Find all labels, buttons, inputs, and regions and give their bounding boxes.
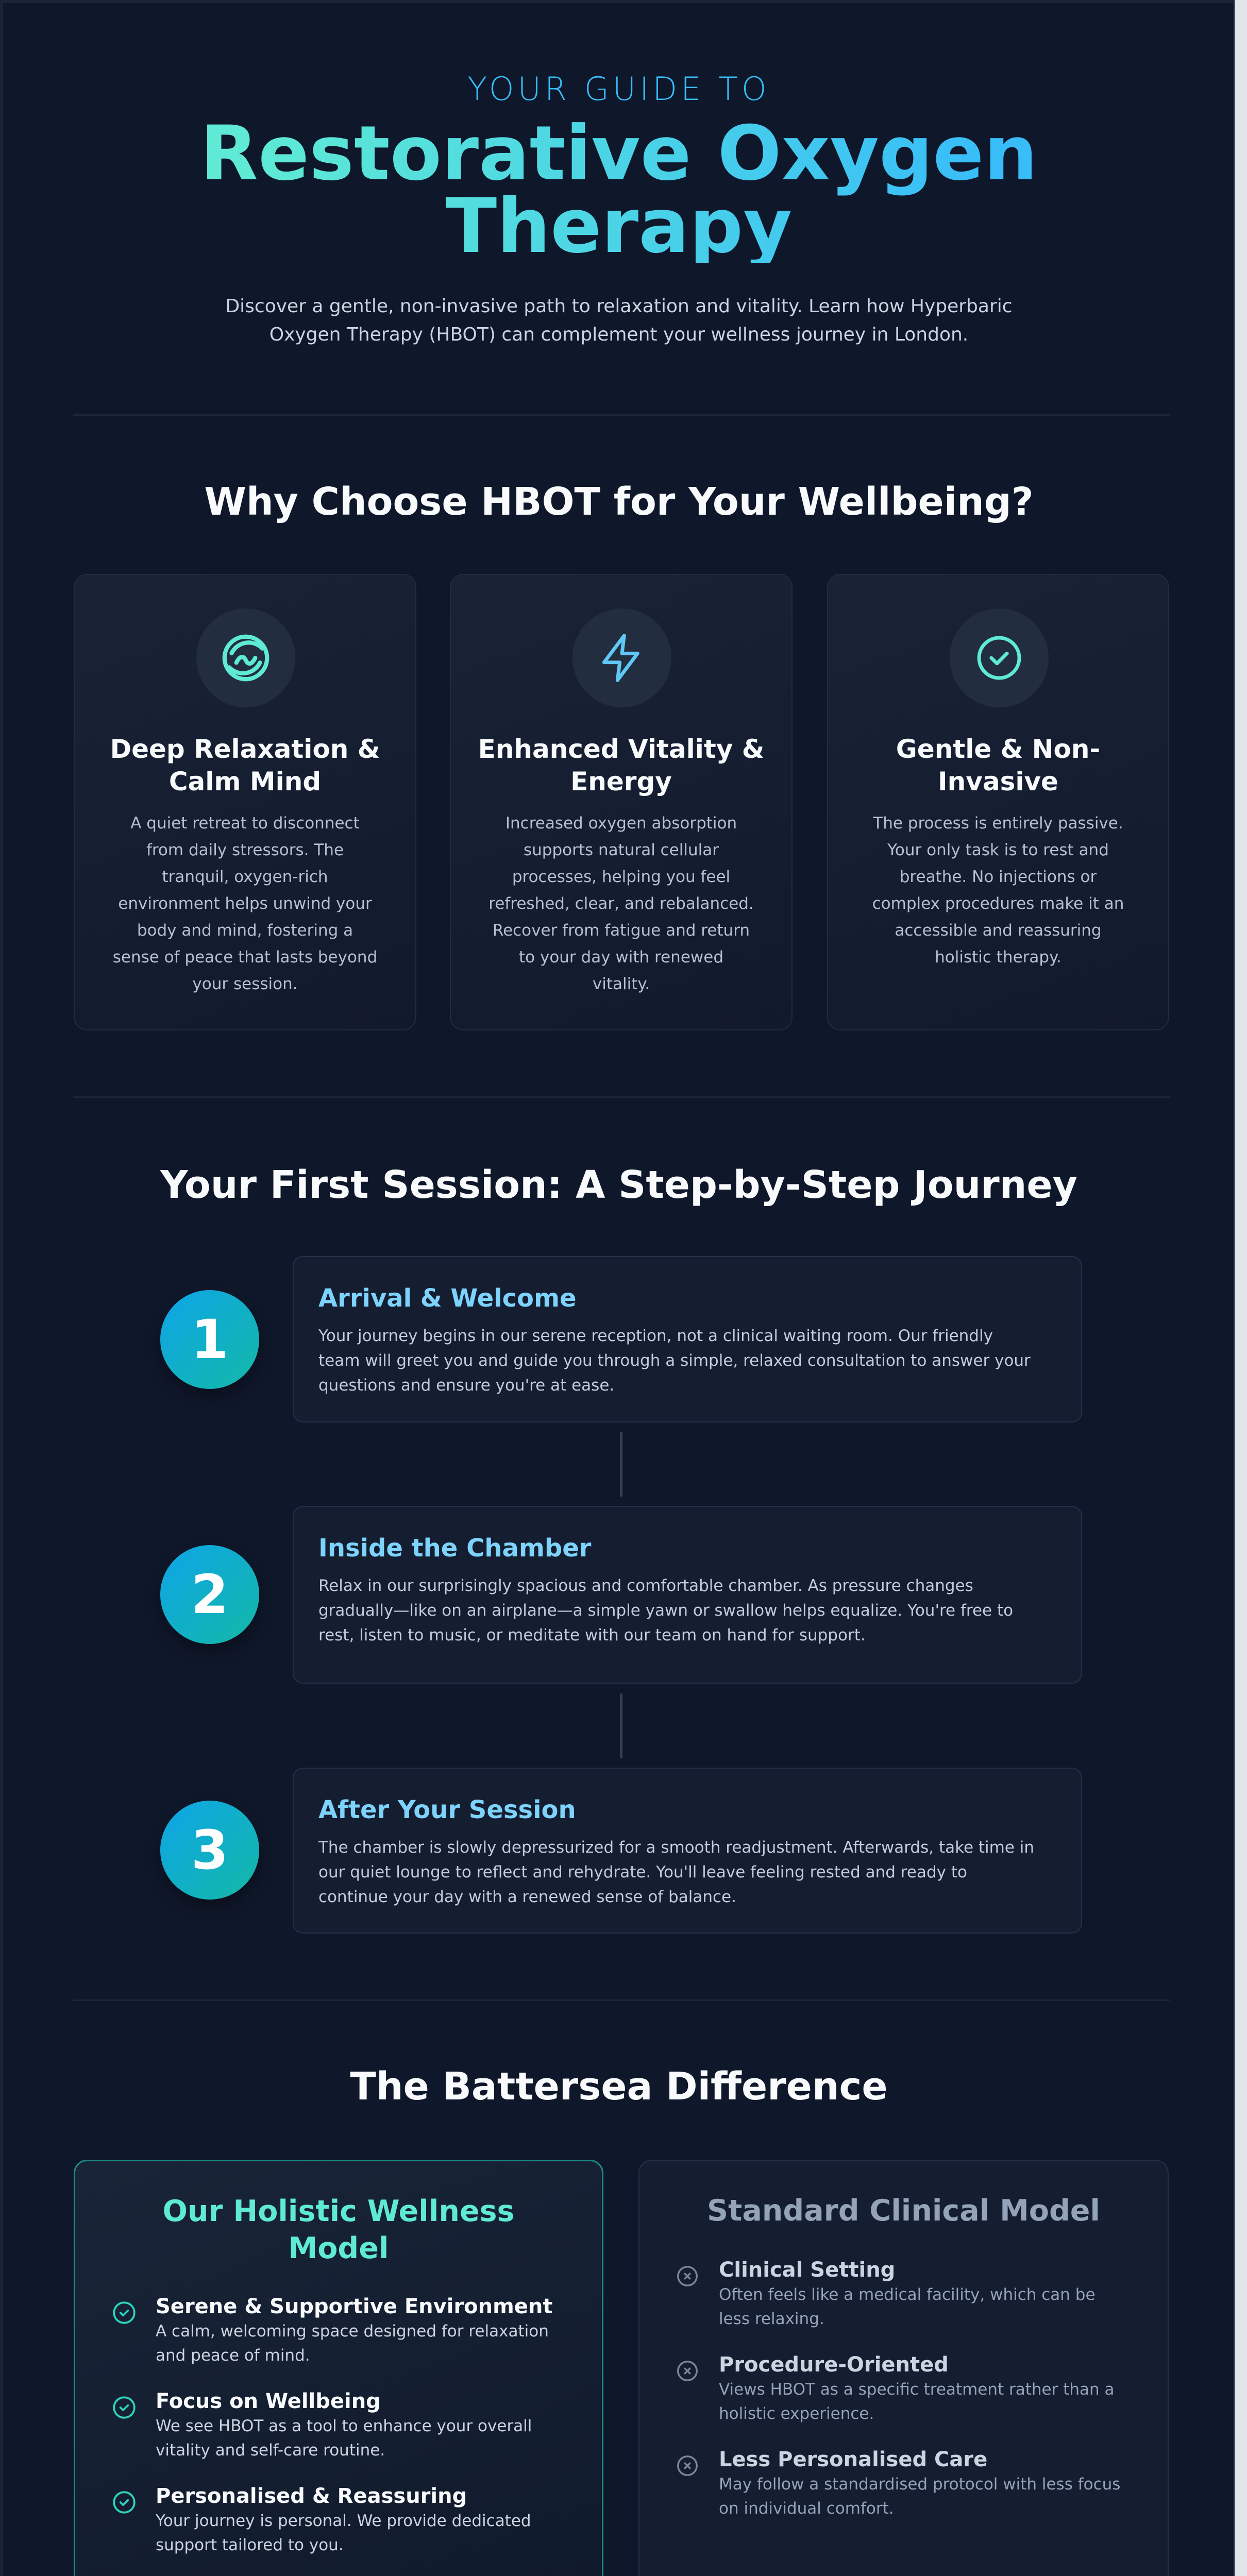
item 2: Focus on Wellbeing bbox=[156, 2389, 381, 2413]
card text: processes, helping you feel bbox=[512, 868, 730, 886]
item 2: holistic experience. bbox=[719, 2404, 874, 2423]
panel: standard clinical model bbox=[638, 2160, 1169, 2576]
connector 2 bbox=[620, 1693, 622, 1758]
item 2 bbox=[113, 2389, 532, 2460]
step 3 card: The chamber is slowly depressurized for a smooth readjustment. Afterwards, take time in bbox=[318, 1838, 1034, 1857]
step 1 card: team will greet you and guide you through a simple, relaxed consultation to answer your bbox=[318, 1351, 1031, 1370]
item 1: and peace of mind. bbox=[156, 2346, 310, 2365]
step 1 number bbox=[160, 1290, 259, 1389]
card text: holistic therapy. bbox=[935, 948, 1061, 967]
card title bbox=[896, 734, 1100, 796]
header: eyebrow: YOUR GUIDE TO bbox=[467, 70, 770, 108]
step 1 number: 1 bbox=[191, 1308, 228, 1371]
card text: Recover from fatigue and return bbox=[493, 921, 750, 940]
step 2 number: 2 bbox=[191, 1563, 228, 1626]
item 3: Your journey is personal. We provide dedicated bbox=[156, 2512, 531, 2530]
heading: why choose: Why Choose HBOT for Your Wellbeing? bbox=[204, 480, 1034, 524]
item 1: Clinical Setting bbox=[719, 2258, 895, 2282]
step 1 card: Your journey begins in our serene reception, not a clinical waiting room. Our friendly bbox=[318, 1327, 993, 1345]
card: vitality bbox=[450, 574, 793, 1030]
card title: Gentle & Non- bbox=[896, 734, 1100, 764]
step 2 card: Inside the Chamber bbox=[318, 1534, 591, 1563]
card text: your session. bbox=[192, 975, 298, 993]
header: subtitle: Oxygen Therapy (HBOT) can complement your wellness journey in London. bbox=[269, 324, 968, 345]
card text: vitality. bbox=[593, 975, 650, 993]
title bbox=[163, 2194, 514, 2265]
card text: tranquil, oxygen-rich bbox=[162, 868, 328, 886]
item 1: Serene & Supportive Environment bbox=[156, 2295, 553, 2318]
item 3: on individual comfort. bbox=[719, 2499, 894, 2518]
step 3 card: continue your day with a renewed sense of balance. bbox=[318, 1888, 736, 1906]
card text: breathe. No injections or bbox=[900, 868, 1097, 886]
step 1 card bbox=[293, 1256, 1082, 1422]
heading: battersea difference: The Battersea Difference bbox=[350, 2064, 888, 2109]
card title: Invasive bbox=[938, 767, 1058, 796]
card title bbox=[478, 734, 764, 796]
step 2 number bbox=[160, 1545, 259, 1644]
item 2: Procedure-Oriented bbox=[719, 2353, 949, 2377]
step 2 card: Relax in our surprisingly spacious and comfortable chamber. As pressure changes bbox=[318, 1577, 973, 1595]
step 2 card: gradually—like on an airplane—a simple yawn or swallow helps equalize. You're free to bbox=[318, 1601, 1013, 1620]
item 2: Views HBOT as a specific treatment rather than a bbox=[719, 2380, 1115, 2399]
connector 1 bbox=[620, 1432, 622, 1497]
item 3: Less Personalised Care bbox=[719, 2448, 987, 2471]
card text: sense of peace that lasts beyond bbox=[113, 948, 377, 967]
icon: lightning bbox=[572, 608, 671, 707]
header: subtitle bbox=[225, 296, 1013, 345]
item 3 bbox=[677, 2448, 1120, 2518]
timeline: steps bbox=[160, 1256, 1082, 1934]
step 1 card: Arrival & Welcome bbox=[318, 1284, 577, 1313]
item 2: vitality and self-care routine. bbox=[156, 2441, 385, 2460]
card title: Calm Mind bbox=[169, 767, 321, 796]
step 3 card: After Your Session bbox=[318, 1795, 576, 1824]
card: deep relaxation bbox=[74, 574, 416, 1030]
card text: to your day with renewed bbox=[519, 948, 723, 967]
item 2: We see HBOT as a tool to enhance your overall bbox=[156, 2417, 532, 2435]
card text: Increased oxygen absorption bbox=[505, 814, 737, 833]
card text bbox=[488, 814, 754, 993]
header: main title: Therapy bbox=[446, 182, 792, 270]
icon: check circle bbox=[950, 608, 1049, 707]
panel: benefit cards bbox=[74, 574, 1169, 1030]
card: gentle bbox=[827, 574, 1169, 1030]
item 1: less relaxing. bbox=[719, 2310, 824, 2328]
header: subtitle: Discover a gentle, non-invasive path to relaxation and vitality. Learn how Hyperbaric bbox=[225, 296, 1013, 317]
panel: holistic model bbox=[74, 2160, 603, 2576]
title: Standard Clinical Model bbox=[707, 2194, 1100, 2228]
title: Model bbox=[289, 2231, 389, 2265]
item 3: Personalised & Reassuring bbox=[156, 2484, 467, 2508]
heading: first session: Your First Session: A Step-by-Step Journey bbox=[160, 1163, 1077, 1207]
card text: A quiet retreat to disconnect bbox=[130, 814, 360, 833]
card title: Enhanced Vitality & bbox=[478, 734, 764, 764]
step 3 number bbox=[160, 1801, 259, 1900]
card title bbox=[110, 734, 380, 796]
card title: Deep Relaxation & bbox=[110, 734, 380, 764]
step 2 card bbox=[293, 1506, 1082, 1684]
header: main title: Restorative Oxygen bbox=[200, 110, 1037, 197]
step 2 card: rest, listen to music, or meditate with our team on hand for support. bbox=[318, 1626, 866, 1645]
item 2 bbox=[677, 2353, 1115, 2423]
item 3: support tailored to you. bbox=[156, 2536, 344, 2554]
icon: refresh circle bbox=[196, 608, 295, 707]
card text: supports natural cellular bbox=[524, 841, 719, 859]
step 3 number: 3 bbox=[191, 1819, 228, 1882]
item 1: Often feels like a medical facility, which can be bbox=[719, 2285, 1096, 2304]
card text: refreshed, clear, and rebalanced. bbox=[488, 894, 754, 913]
header: main title bbox=[158, 117, 1080, 263]
item 3: May follow a standardised protocol with less focus bbox=[719, 2475, 1120, 2494]
item 3 bbox=[113, 2484, 531, 2554]
item 1 bbox=[677, 2258, 1096, 2328]
card text: from daily stressors. The bbox=[146, 841, 344, 859]
card text: The process is entirely passive. bbox=[873, 814, 1123, 833]
step 3 card: our quiet lounge to reflect and rehydrate. You'll leave feeling rested and ready to bbox=[318, 1863, 967, 1882]
card text bbox=[113, 814, 377, 993]
title: Our Holistic Wellness bbox=[163, 2194, 514, 2228]
card text: environment helps unwind your bbox=[118, 894, 372, 913]
item 1: A calm, welcoming space designed for relaxation bbox=[156, 2322, 549, 2341]
step 3 card bbox=[293, 1768, 1082, 1934]
card text: body and mind, fostering a bbox=[137, 921, 353, 940]
card text: accessible and reassuring bbox=[895, 921, 1102, 940]
step 1 card: questions and ensure you're at ease. bbox=[318, 1376, 614, 1395]
item 1 bbox=[113, 2295, 553, 2365]
card text bbox=[872, 814, 1124, 967]
card title: Energy bbox=[570, 767, 672, 796]
card text: Your only task is to rest and bbox=[887, 841, 1109, 859]
card text: complex procedures make it an bbox=[872, 894, 1124, 913]
